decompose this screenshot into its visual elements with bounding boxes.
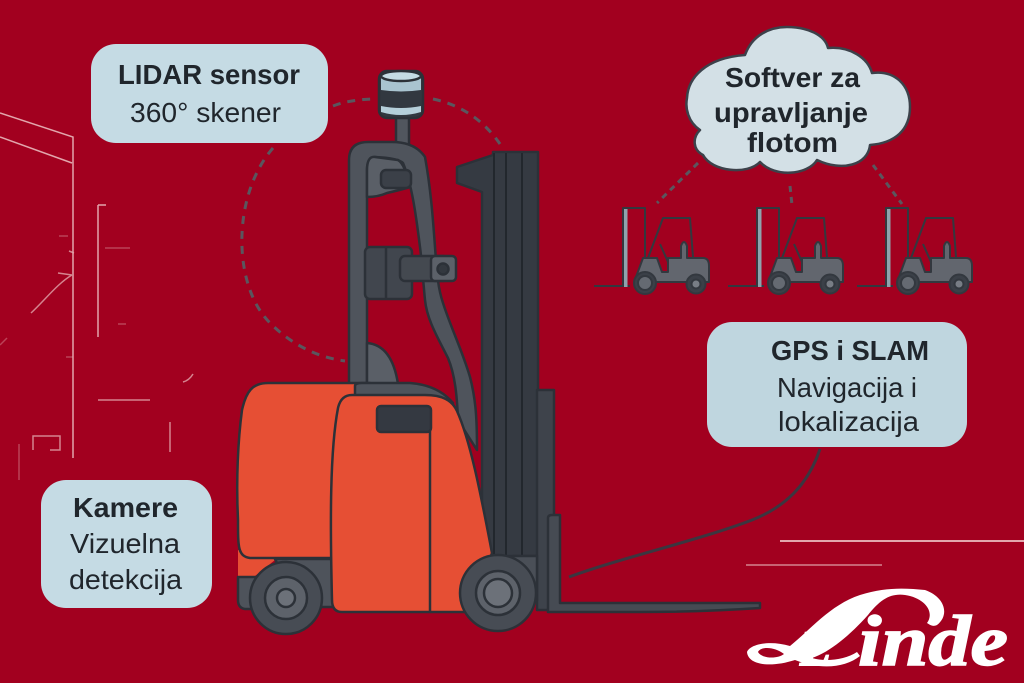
linde logo xyxy=(747,589,1008,681)
mast arch xyxy=(349,142,477,450)
door body xyxy=(331,395,492,612)
small forklift 3 xyxy=(857,208,972,294)
mast rails xyxy=(457,152,538,556)
rear body lower sliver xyxy=(238,550,280,578)
linde logo: L xyxy=(799,620,831,676)
seat xyxy=(355,383,453,403)
lidar label: LIDAR sensor xyxy=(118,59,300,90)
kamere label: Vizuelna xyxy=(70,528,180,559)
front wheel xyxy=(460,555,536,631)
cloud: fleet software xyxy=(686,27,910,173)
gps connector line xyxy=(569,449,820,577)
kamere label: Kamere xyxy=(73,492,178,523)
lidar sensor icon xyxy=(379,71,423,146)
lidar label: 360° skener xyxy=(130,97,281,128)
rear body xyxy=(237,383,370,558)
lidar label xyxy=(91,44,328,143)
gps label xyxy=(707,322,967,447)
small forklift 1 xyxy=(594,208,709,294)
kamere label xyxy=(41,480,212,608)
gps label: Navigacija i xyxy=(777,372,917,403)
seat back xyxy=(367,343,398,384)
gps label: lokalizacija xyxy=(778,406,919,437)
small forklift 2 xyxy=(728,208,843,294)
cloud connectors xyxy=(657,163,902,205)
cloud: fleet software: flotom xyxy=(747,127,838,158)
kamere label: detekcija xyxy=(69,564,182,595)
cloud: fleet software: Softver za xyxy=(725,62,860,93)
window xyxy=(377,406,431,432)
carriage xyxy=(537,390,554,610)
rear wheel xyxy=(250,562,322,634)
main forklift xyxy=(237,71,760,634)
cloud: fleet software: upravljanje xyxy=(714,97,868,128)
gps label: GPS i SLAM xyxy=(771,335,929,366)
linde logo: inde xyxy=(858,601,1008,681)
fork xyxy=(548,515,760,612)
dashed scan circle xyxy=(242,99,500,361)
camera bracket xyxy=(365,247,456,299)
